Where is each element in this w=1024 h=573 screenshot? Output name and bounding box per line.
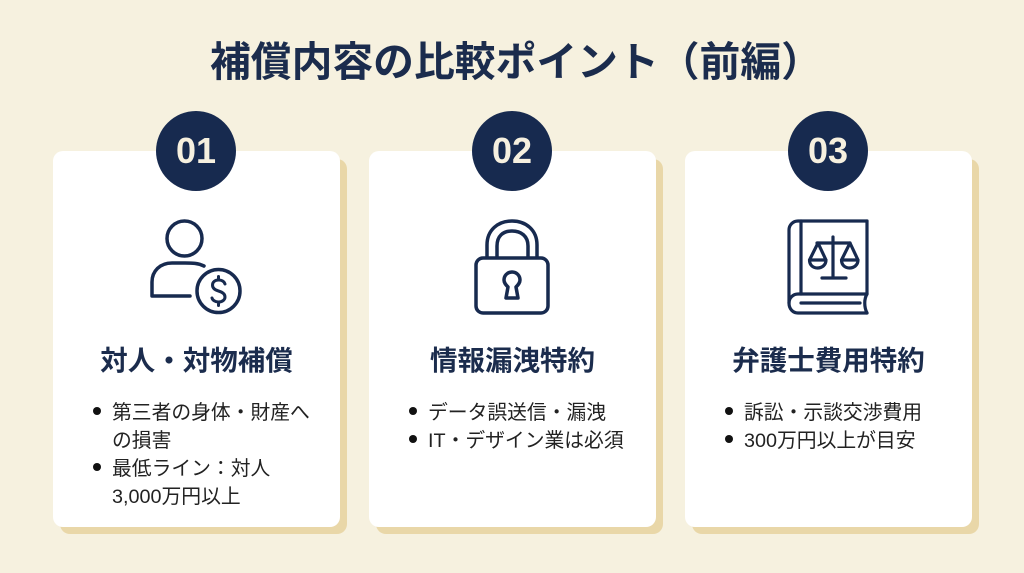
bullet list: card 1 — [93, 402, 310, 508]
number badge 01 — [156, 111, 236, 191]
heading: card 1: 対人・対物補償 — [100, 345, 293, 376]
title: 補償内容の比較ポイント（前編） — [210, 39, 822, 85]
bullet list: card 2 — [409, 402, 624, 452]
card shadow 2 — [376, 159, 663, 534]
bullet list: card 1: の損害 — [112, 430, 171, 452]
icon: padlock — [474, 219, 550, 315]
number badge 02 — [472, 111, 552, 191]
card shadow 3 — [692, 159, 979, 534]
bullet list: card 2: IT・デザイン業は必須 — [428, 430, 624, 452]
bullet list: card 2: データ誤送信・漏洩 — [428, 402, 606, 424]
number badge 01: 01 — [176, 130, 216, 171]
heading: card 3: 弁護士費用特約 — [732, 345, 925, 376]
panel: card 1 — [53, 151, 340, 527]
heading: card 2: 情報漏洩特約 — [430, 345, 595, 376]
panel: card 2 — [369, 151, 656, 527]
number badge 02: 02 — [492, 130, 532, 171]
icon: law book with scales — [787, 219, 869, 315]
number badge 03 — [788, 111, 868, 191]
bullet list: card 3 — [725, 402, 922, 452]
icon: person with dollar coin — [150, 219, 242, 314]
bullet list: card 1: 3,000万円以上 — [112, 486, 241, 508]
bullet list: card 1: 最低ライン：対人 — [112, 458, 270, 480]
bullet list: card 1: 第三者の身体・財産へ — [112, 402, 310, 424]
bullet list: card 3: 300万円以上が目安 — [744, 430, 915, 452]
number badge 03: 03 — [808, 130, 848, 171]
panel: card 3 — [685, 151, 972, 527]
card shadow 1 — [60, 159, 347, 534]
bullet list: card 3: 訴訟・示談交渉費用 — [744, 402, 922, 424]
